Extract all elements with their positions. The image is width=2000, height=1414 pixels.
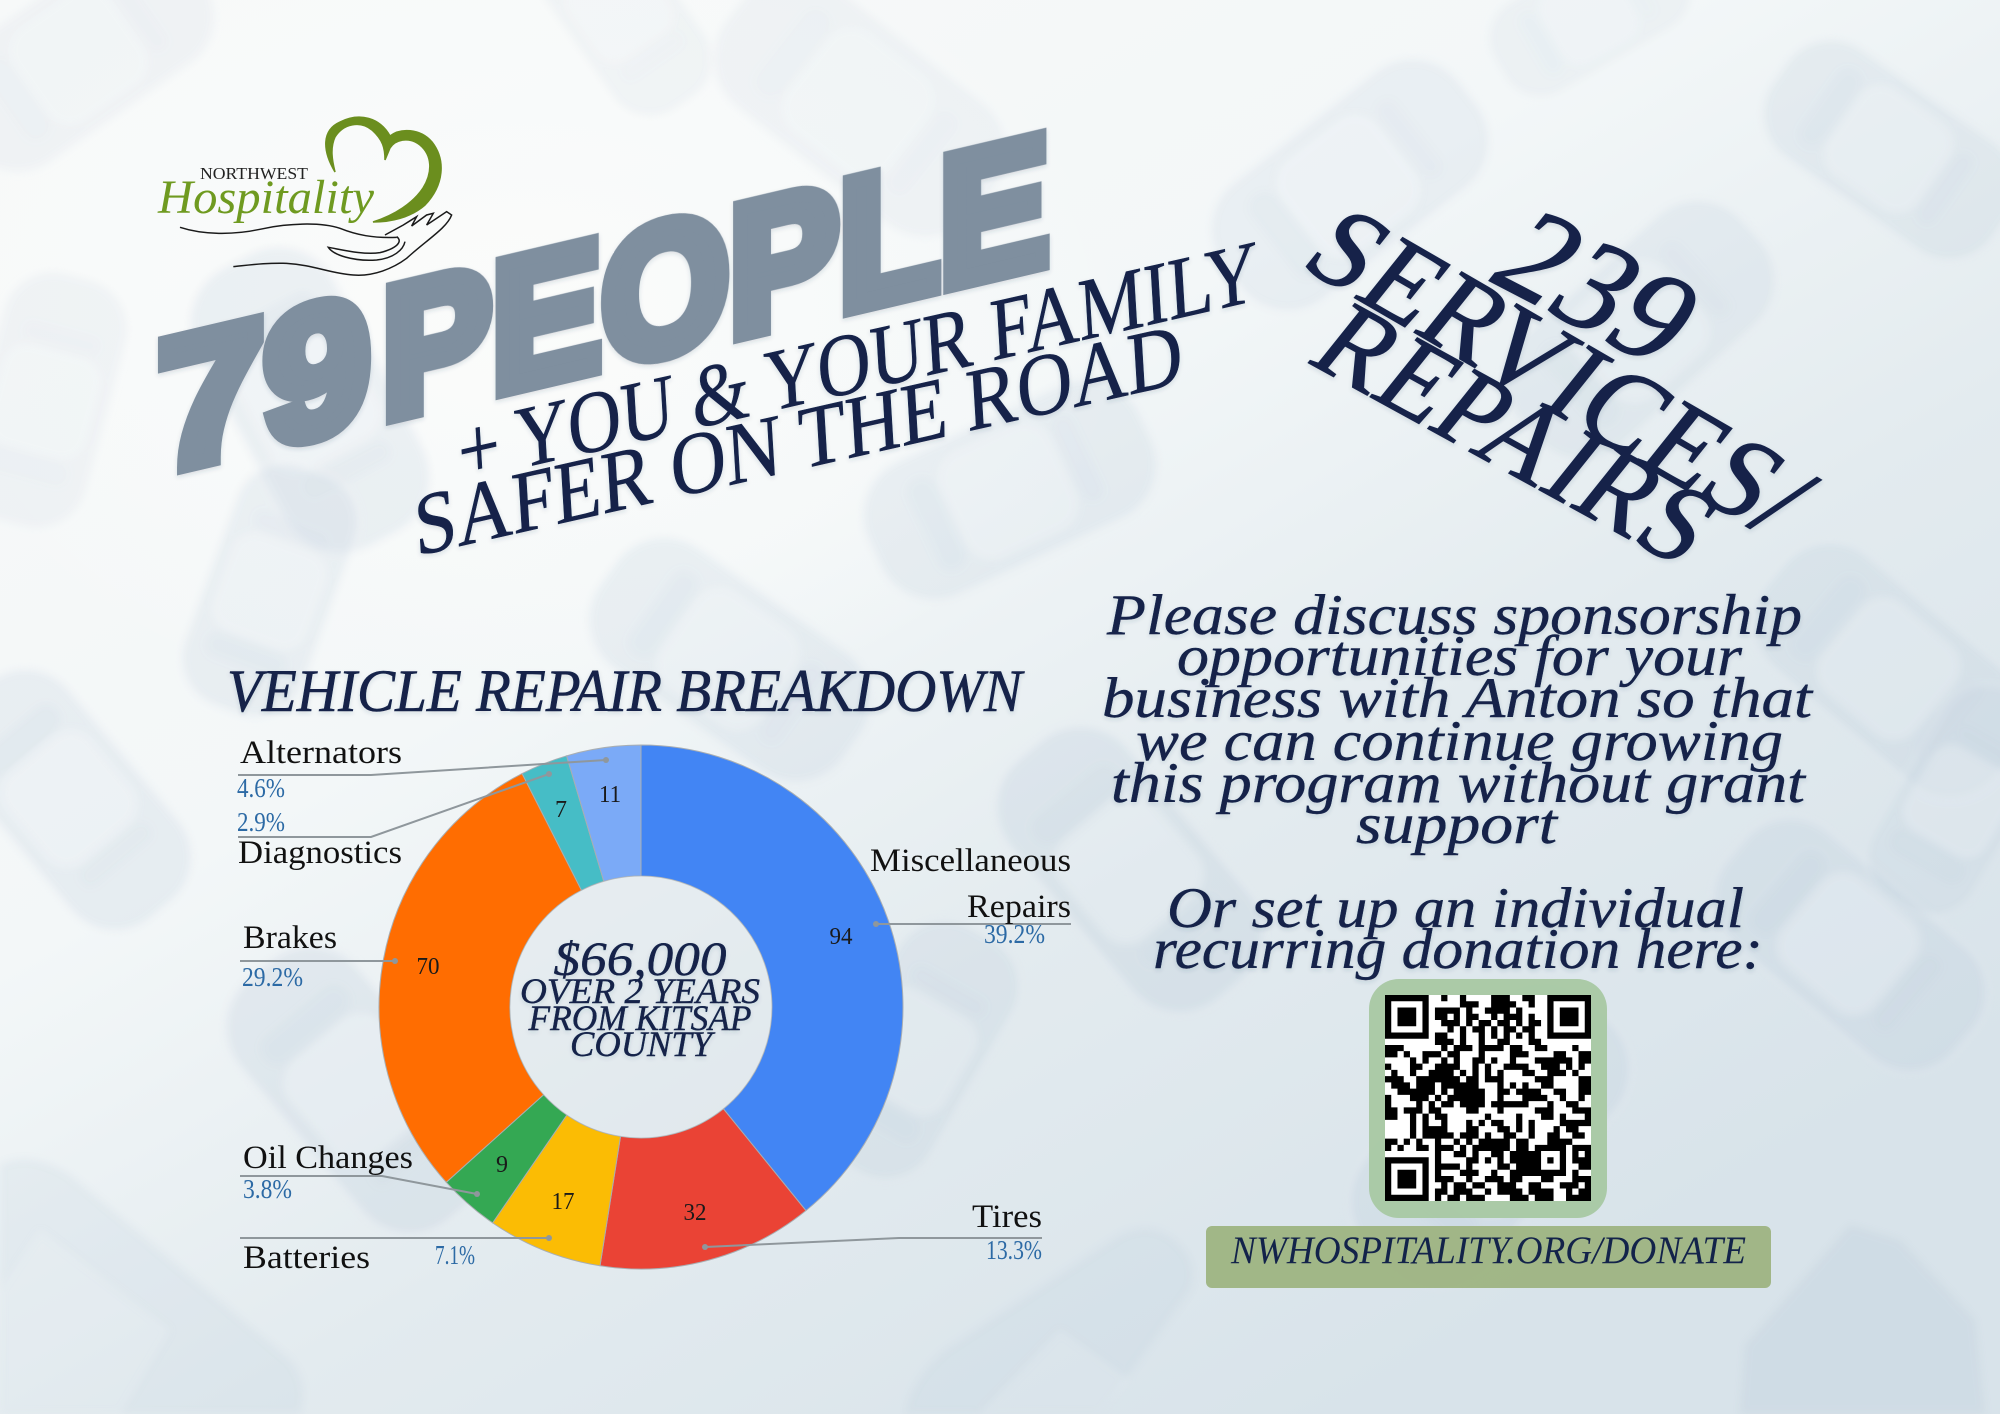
callout: oil changes bbox=[240, 1140, 480, 1204]
donut center caption: OVER 2 YEARS bbox=[520, 971, 760, 1011]
segment values bbox=[416, 782, 852, 1226]
paragraph: recurring donation prompt: recurring donation here: bbox=[1153, 918, 1763, 981]
segment values: 32 bbox=[684, 1200, 706, 1226]
paragraph: sponsorship appeal: this program without grant bbox=[1111, 752, 1806, 815]
stat: 239 services / repairs bbox=[1282, 183, 1839, 588]
callout: batteries: 7.1% bbox=[435, 1240, 475, 1270]
segment values: 11 bbox=[599, 782, 621, 808]
segment: alternators bbox=[567, 745, 641, 881]
panel: donate link bbox=[1206, 1226, 1771, 1288]
logo text: Hospitality: Hospitality bbox=[157, 171, 375, 224]
paragraph: sponsorship appeal: opportunities for your bbox=[1177, 625, 1743, 688]
callout: oil changes: Oil Changes bbox=[243, 1140, 413, 1176]
callout: diagnostics bbox=[237, 771, 552, 871]
segment values: 9 bbox=[496, 1152, 508, 1178]
segment values: 70 bbox=[416, 954, 440, 980]
segment values: 17 bbox=[552, 1189, 574, 1215]
segment: tires bbox=[600, 1109, 806, 1269]
callout: alternators: Alternators bbox=[240, 735, 402, 771]
number: 79: 79 bbox=[158, 254, 370, 511]
paragraph: sponsorship appeal: we can continue growing bbox=[1136, 710, 1783, 773]
paragraph: sponsorship appeal: Please discuss sponsorship bbox=[1106, 584, 1802, 647]
segment: batteries bbox=[493, 1115, 620, 1266]
callout: miscellaneous repairs: Miscellaneous bbox=[870, 843, 1071, 879]
callout: miscellaneous repairs: Repairs bbox=[967, 889, 1071, 925]
paragraph: sponsorship appeal bbox=[1102, 584, 1813, 856]
donut center caption: $66,000 bbox=[554, 933, 726, 986]
donut center caption: COUNTY bbox=[570, 1024, 716, 1064]
subheading: you and your family safer on the road bbox=[411, 223, 1261, 576]
segment: miscellaneous repairs bbox=[641, 745, 903, 1211]
donut center caption bbox=[520, 933, 760, 1064]
line: SAFER ON THE ROAD: SAFER ON THE ROAD bbox=[411, 305, 1185, 576]
donut hole tint bbox=[510, 876, 772, 1138]
paragraph: sponsorship appeal: support bbox=[1356, 793, 1558, 856]
title: vehicle repair breakdown: VEHICLE REPAIR BREAKDOWN bbox=[227, 658, 1025, 724]
callout: alternators bbox=[237, 735, 609, 803]
QR code bbox=[1385, 995, 1591, 1201]
line: REPAIRS: REPAIRS bbox=[1289, 281, 1745, 588]
callout: batteries: Batteries bbox=[243, 1240, 370, 1276]
paragraph: sponsorship appeal: business with Anton so that bbox=[1102, 667, 1813, 730]
callout: brakes: 29.2% bbox=[242, 962, 303, 992]
segment: diagnostics bbox=[522, 756, 604, 890]
logo: Northwest Hospitality bbox=[157, 117, 452, 275]
donut center caption: FROM KITSAP bbox=[528, 998, 752, 1038]
callout: batteries bbox=[240, 1235, 552, 1276]
paragraph: recurring donation prompt: Or set up an individual bbox=[1167, 877, 1744, 940]
callout: brakes bbox=[240, 920, 398, 992]
word: PEOPLE: PEOPLE bbox=[382, 95, 1049, 458]
callout: brakes: Brakes bbox=[243, 920, 337, 956]
line: SERVICES/: SERVICES/ bbox=[1282, 184, 1839, 561]
link text: NWHOSPITALITY.ORG/DONATE bbox=[1230, 1229, 1746, 1272]
icon: open hand bbox=[180, 212, 452, 275]
callout: diagnostics: Diagnostics bbox=[238, 835, 402, 871]
callout: miscellaneous repairs bbox=[870, 843, 1071, 949]
number: 239: 239 bbox=[1465, 183, 1732, 391]
segment values: 7 bbox=[555, 797, 567, 823]
callout: alternators: 4.6% bbox=[237, 773, 285, 803]
segment values: 94 bbox=[830, 924, 852, 950]
logo text: NORTHWEST: NORTHWEST bbox=[200, 164, 309, 183]
icon: green heart bbox=[326, 117, 441, 222]
callout: tires bbox=[702, 1199, 1042, 1265]
segment: brakes bbox=[379, 774, 582, 1182]
paragraph: recurring donation prompt bbox=[1153, 877, 1763, 981]
callout: tires: Tires bbox=[972, 1199, 1042, 1235]
panel: QR code card bbox=[1369, 979, 1607, 1218]
callout: tires: 13.3% bbox=[986, 1235, 1042, 1265]
chart: donut of vehicle repairs bbox=[379, 745, 903, 1269]
callout: oil changes: 3.8% bbox=[243, 1174, 292, 1204]
callout: miscellaneous repairs: 39.2% bbox=[984, 919, 1045, 949]
line: + YOU & YOUR FAMILY: + YOU & YOUR FAMILY bbox=[455, 223, 1261, 502]
callout: diagnostics: 2.9% bbox=[237, 807, 285, 837]
heading: 79 PEOPLE bbox=[158, 95, 1049, 511]
segment: oil changes bbox=[446, 1095, 567, 1223]
